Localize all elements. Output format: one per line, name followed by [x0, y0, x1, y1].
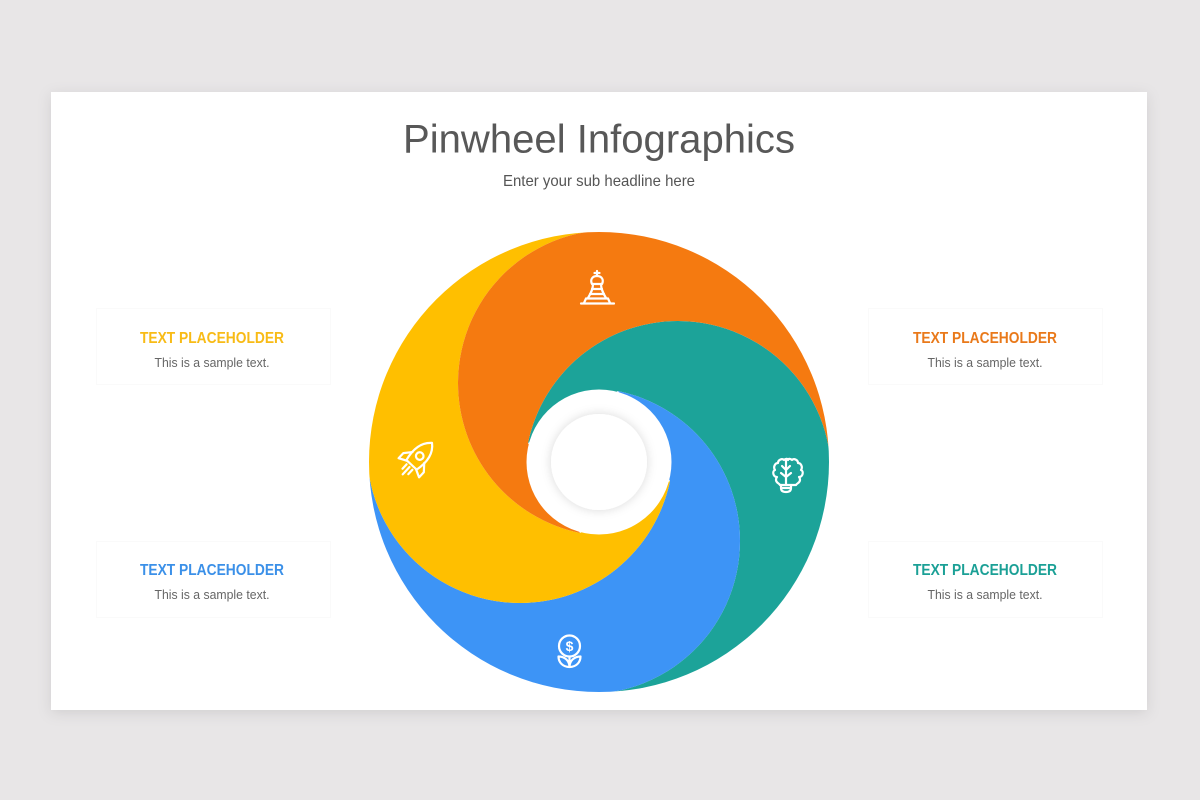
subtitle: Enter your sub headline here — [503, 173, 695, 190]
blade: yellow — [367, 229, 670, 603]
panel: blue text card — [96, 542, 330, 618]
center hole — [526, 390, 672, 534]
card text: This is a sample text. — [928, 588, 1042, 602]
card heading: TEXT PLACEHOLDER — [140, 562, 284, 579]
card text: This is a sample text. — [928, 356, 1042, 370]
blade: blue — [366, 391, 740, 694]
icon: money flower — [558, 636, 580, 667]
blade: orange — [458, 230, 832, 533]
card heading: TEXT PLACEHOLDER — [140, 330, 284, 347]
pinwheel chart — [366, 229, 832, 695]
slide panel — [51, 92, 1147, 710]
card heading: TEXT PLACEHOLDER — [913, 330, 1057, 347]
panel: orange text card — [868, 308, 1102, 384]
panel: yellow text card — [96, 308, 330, 384]
icon: rocket — [392, 433, 442, 484]
card text: This is a sample text. — [154, 356, 270, 370]
icon: chess king — [581, 271, 614, 304]
panel: teal text card — [868, 542, 1102, 618]
dollar sign: $ — [566, 638, 574, 654]
blade: teal — [528, 321, 831, 695]
center disc — [551, 414, 647, 510]
card heading: TEXT PLACEHOLDER — [913, 562, 1057, 579]
icon: brain bulb — [773, 459, 803, 492]
card text: This is a sample text. — [154, 588, 270, 602]
title: Pinwheel Infographics — [403, 118, 795, 162]
